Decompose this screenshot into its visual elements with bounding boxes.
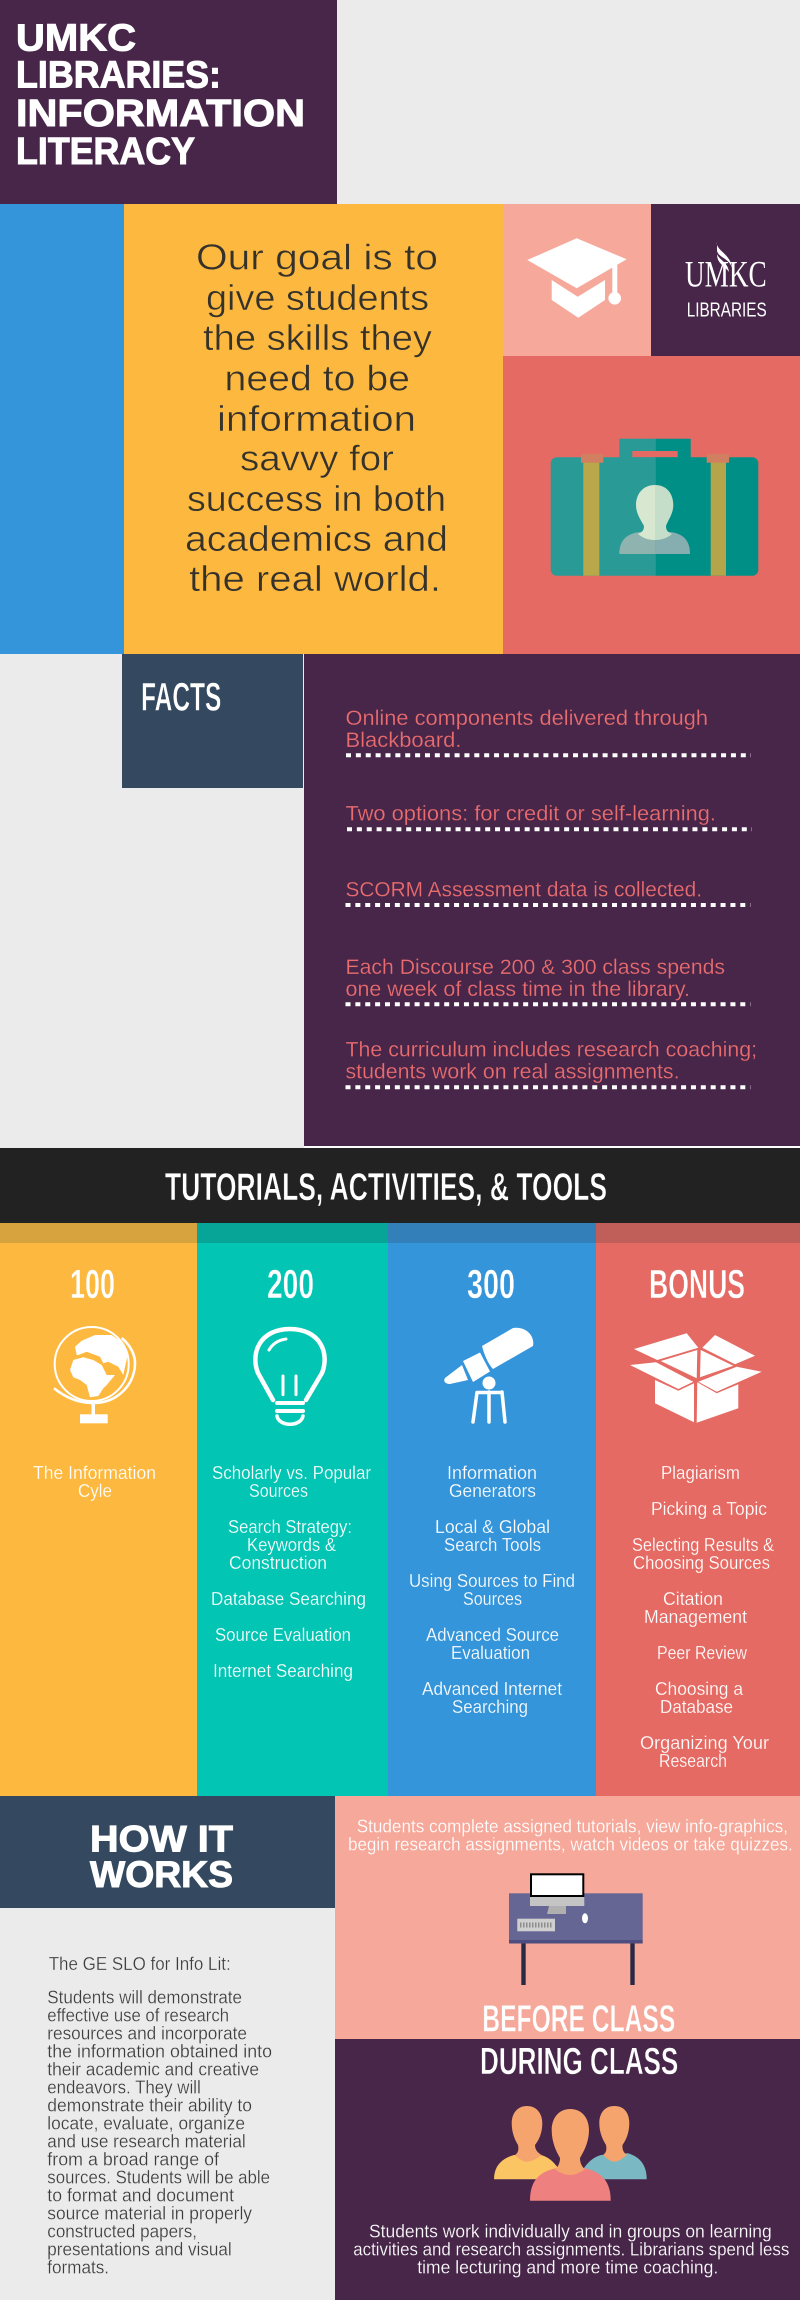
goal text: information [217, 398, 416, 439]
panel: title [0, 0, 337, 204]
icon: logo flame [717, 242, 732, 272]
list: 200 topics: Internet Searching [213, 1661, 353, 1681]
fact: two options: Two options: for credit or self-learning. [346, 802, 716, 826]
panel: during class [335, 2039, 800, 2300]
text block: GE SLO: presentations and visual [47, 2239, 232, 2259]
list: bonus topics: Database [660, 1697, 733, 1717]
panel: blue side block [0, 204, 124, 654]
text block: during class description: Students work individually and in groups on learning [369, 2221, 772, 2241]
list: 200 topics: Construction [229, 1553, 327, 1573]
text block: before class description: Students complete assigned tutorials, view info-graphics, [357, 1817, 788, 1837]
list: 300 topics: Generators [449, 1481, 536, 1501]
column: 100 [0, 1223, 197, 1796]
text block: GE SLO: Students will demonstrate [47, 1987, 242, 2007]
panel: suitcase [503, 356, 800, 654]
text block: during class description: time lecturing and more time coaching. [417, 2257, 718, 2277]
panel: UMKC Libraries logo [651, 204, 800, 356]
panel: before class [335, 1796, 800, 2041]
list: 200 topics [211, 1463, 371, 1681]
text block: GE SLO: the information obtained into [47, 2041, 272, 2061]
icon: telescope [444, 1328, 533, 1422]
icon: graduation cap [527, 238, 627, 318]
icon: three people [494, 2106, 647, 2201]
list: 200 topics: Scholarly vs. Popular [212, 1463, 371, 1483]
list: 300 topics: Using Sources to Find [409, 1571, 575, 1591]
text block: GE SLO: endeavors. They will [47, 2077, 201, 2097]
title [16, 18, 305, 173]
icon: light bulb [255, 1329, 325, 1424]
text block: GE SLO: to format and document [47, 2185, 234, 2205]
list: 200 topics: Search Strategy: [228, 1517, 352, 1537]
text block: GE SLO: constructed papers, [47, 2221, 197, 2241]
logo text: LIBRARIES [687, 299, 767, 322]
list: 200 topics: Keywords & [247, 1535, 336, 1555]
list: bonus topics: Citation [663, 1589, 723, 1609]
column: 300 [388, 1223, 596, 1796]
text block: GE SLO [47, 1954, 272, 2277]
panel: white separator [304, 1146, 800, 1148]
list: 100 topics: Cyle [78, 1481, 112, 1501]
list: bonus topics: Peer Review [657, 1643, 748, 1663]
heading: before class: BEFORE CLASS [482, 1999, 675, 2041]
goal text [185, 236, 448, 599]
text block: GE SLO: resources and incorporate [47, 2023, 247, 2043]
fact: online components [346, 706, 751, 755]
heading: 200: 200 [267, 1261, 314, 1307]
text block: GE SLO: formats. [47, 2257, 109, 2277]
list: 300 topics: Advanced Source [426, 1625, 559, 1645]
goal text: give students [206, 277, 429, 318]
icon: computer desk [509, 1874, 643, 1985]
title: INFORMATION [16, 93, 305, 135]
column: 200 [197, 1223, 388, 1796]
list: 300 topics: Search Tools [444, 1535, 541, 1555]
goal text: the skills they [203, 317, 432, 358]
text block: GE SLO: The GE SLO for Info Lit: [49, 1954, 231, 1974]
list: 300 topics: Advanced Internet [422, 1679, 562, 1699]
heading: how it works: HOW IT [90, 1819, 233, 1860]
fact: curriculum: The curriculum includes research coaching; [346, 1038, 757, 1062]
heading: facts: FACTS [141, 676, 221, 720]
list: 300 topics [409, 1463, 575, 1717]
icon: suitcase with person [551, 439, 758, 576]
text block: before class description [348, 1817, 793, 1855]
list: 100 topics: The Information [33, 1463, 156, 1483]
list: 300 topics: Searching [452, 1697, 528, 1717]
text block: GE SLO: and use research material [47, 2131, 246, 2151]
text block: during class description [353, 2221, 789, 2277]
list: bonus topics: Picking a Topic [651, 1499, 767, 1519]
list: 300 topics: Sources [463, 1589, 522, 1609]
list: 300 topics: Information [447, 1463, 537, 1483]
heading: how it works: WORKS [90, 1854, 233, 1895]
heading: 100: 100 [70, 1261, 115, 1307]
panel: facts heading [122, 654, 303, 788]
heading: 300: 300 [467, 1261, 515, 1307]
fact: curriculum [346, 1038, 757, 1087]
list: bonus topics [632, 1463, 774, 1771]
list: bonus topics: Plagiarism [661, 1463, 740, 1483]
text block: GE SLO: from a broad range of [47, 2149, 220, 2169]
fact: discourse classes: one week of class time in the library. [346, 977, 690, 1001]
heading: during class: DURING CLASS [480, 2041, 678, 2083]
goal text: need to be [224, 358, 410, 398]
goal text: savvy for [240, 438, 394, 478]
panel: goal statement [124, 204, 503, 654]
logo text: UMKC [685, 255, 767, 296]
fact: discourse classes [346, 955, 750, 1004]
heading: how it works [90, 1819, 233, 1895]
list: 200 topics: Database Searching [211, 1589, 366, 1609]
panel: graduation cap [503, 204, 651, 356]
goal text: the real world. [189, 558, 441, 599]
logo text [685, 255, 767, 322]
text block: GE SLO: source material in properly [47, 2203, 252, 2223]
panel: how it works heading [0, 1796, 335, 1908]
fact: discourse classes: Each Discourse 200 & 300 class spends [346, 955, 725, 979]
icon: open box [630, 1333, 762, 1423]
list: bonus topics: Organizing Your [640, 1733, 769, 1753]
column: bonus [596, 1223, 800, 1796]
list: bonus topics: Choosing a [655, 1679, 744, 1699]
list: bonus topics: Choosing Sources [633, 1553, 770, 1573]
list: bonus topics: Research [659, 1751, 727, 1771]
text block: GE SLO: demonstrate their ability to [47, 2095, 252, 2115]
heading: bonus: BONUS [649, 1261, 745, 1307]
text block: GE SLO: locate, evaluate, organize [47, 2113, 245, 2133]
list: bonus topics: Management [644, 1607, 747, 1627]
heading: tutorials, activities, and tools: TUTORIALS, ACTIVITIES, & TOOLS [165, 1166, 607, 1209]
text block: GE SLO: effective use of research [47, 2005, 229, 2025]
list: 200 topics: Sources [249, 1481, 308, 1501]
title: LIBRARIES: [16, 54, 221, 96]
text block: GE SLO: their academic and creative [47, 2059, 259, 2079]
fact: SCORM: SCORM Assessment data is collected. [346, 878, 702, 902]
list: 100 topics [33, 1463, 156, 1501]
icon: globe [54, 1327, 135, 1423]
list: 300 topics: Local & Global [435, 1517, 550, 1537]
list: bonus topics: Selecting Results & [632, 1535, 774, 1555]
fact: curriculum: students work on real assignments. [346, 1060, 680, 1084]
fact: online components: Blackboard. [346, 728, 462, 752]
fact: online components: Online components delivered through [346, 706, 708, 730]
title: LITERACY [16, 131, 195, 173]
goal text: academics and [185, 518, 448, 559]
goal text: success in both [187, 478, 446, 519]
panel: tutorials heading [0, 1148, 800, 1223]
text block: GE SLO: sources. Students will be able [47, 2167, 270, 2187]
panel: facts list [304, 654, 800, 1146]
title: UMKC [16, 18, 136, 60]
goal text: Our goal is to [196, 236, 438, 278]
list: 200 topics: Source Evaluation [215, 1625, 351, 1645]
list: 300 topics: Evaluation [451, 1643, 530, 1663]
